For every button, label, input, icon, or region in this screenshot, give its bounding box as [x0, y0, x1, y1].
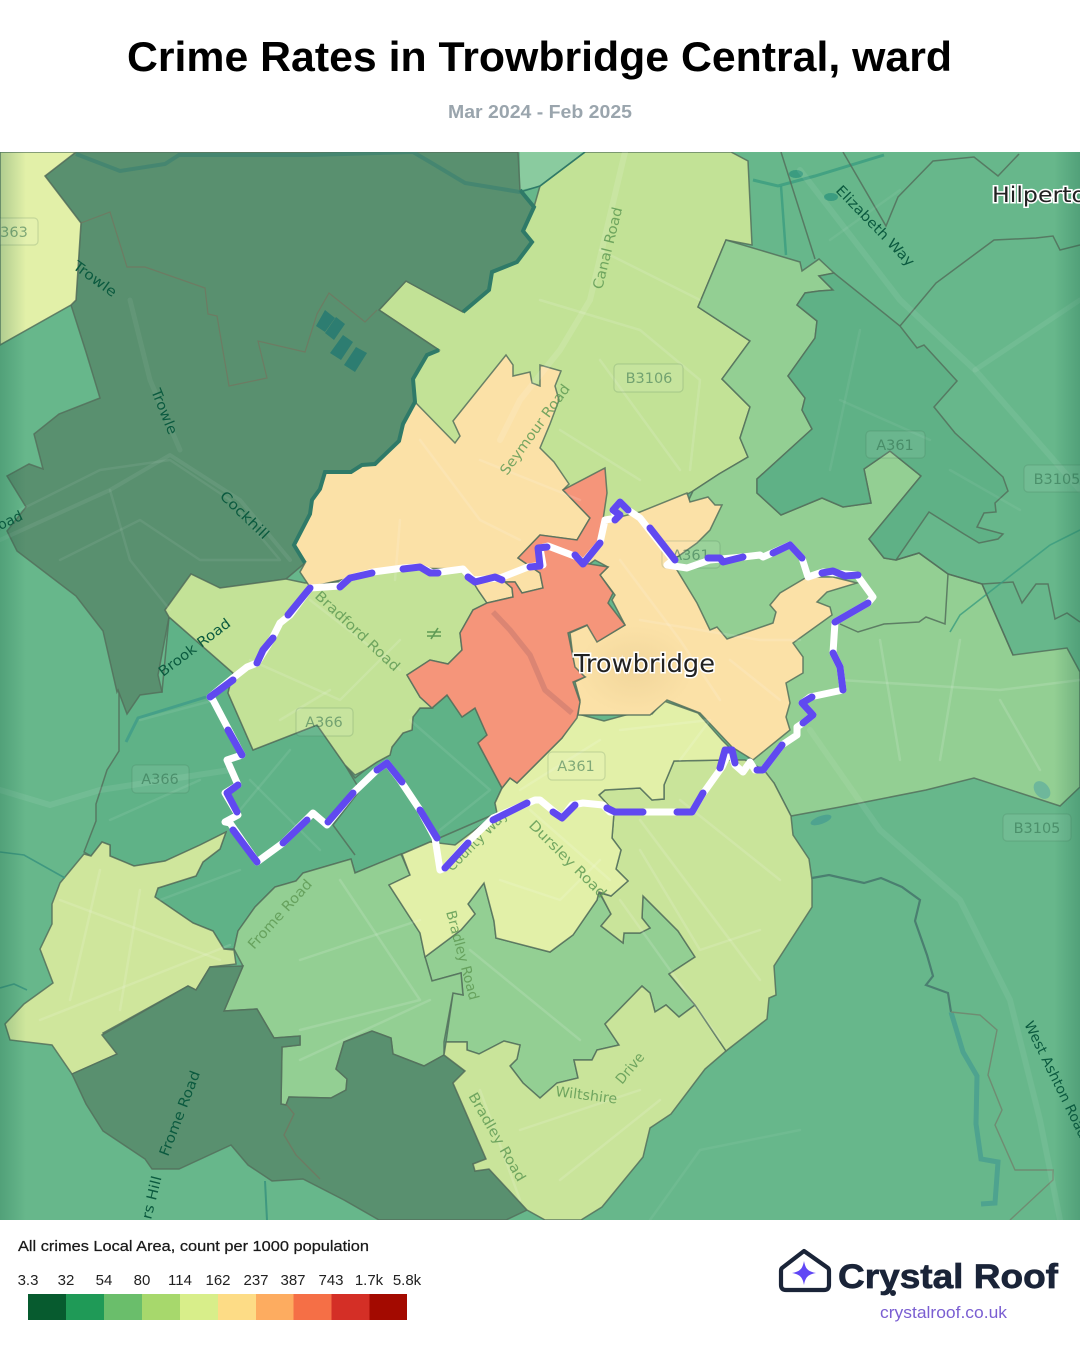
legend [18, 1238, 422, 1320]
road labels: Frome Road [245, 877, 316, 953]
region: north-east darker-green area [757, 273, 1008, 560]
road badges: A366 [141, 772, 179, 788]
regions: west and ward south-west low-crime areas [84, 617, 502, 949]
logo: Crystal Roof [781, 1251, 1059, 1322]
road labels: Canal Road [590, 206, 626, 291]
region: north-east river area [520, 152, 585, 190]
road labels: County Way [444, 807, 511, 875]
map panel [0, 152, 1080, 1221]
subtitle: date range: Mar 2024 - Feb 2025 [448, 101, 632, 122]
road labels [0, 183, 1080, 1221]
road labels: Frome Road [157, 1069, 204, 1158]
website url: crystalroof.co.uk [880, 1304, 1008, 1322]
ponds [316, 170, 1054, 828]
legend tick labels: 1.7k [355, 1272, 384, 1289]
region: Bradford Road light-green area [165, 567, 487, 775]
region: south-west pale-green area [5, 832, 236, 1074]
title: Crime Rates in Trowbridge Central, ward [127, 33, 952, 80]
region: south medium-green area [425, 883, 695, 1098]
road labels: Trowle [69, 258, 120, 301]
road labels: Seymour Road [497, 382, 574, 478]
road labels: Cockhill [216, 488, 272, 543]
road network [0, 152, 1080, 1220]
road labels: rs Hill [139, 1174, 166, 1221]
legend tick labels: 114 [168, 1272, 192, 1289]
legend tick labels: 3.3 [18, 1272, 38, 1289]
legend tick labels: 32 [58, 1272, 74, 1289]
region: Frome Road medium-green area [224, 854, 463, 1105]
road badges: A361 [876, 438, 914, 454]
legend tick labels: 5.8k [393, 1272, 422, 1289]
region: north light-green area [379, 152, 752, 540]
inner boundaries and streams [0, 152, 1080, 1220]
region: south-east pale-green area [599, 760, 812, 1051]
road labels: Elizabeth Way [832, 183, 917, 270]
legend tick labels: 387 [280, 1272, 306, 1289]
ward boundary: Trowbridge Central [210, 502, 873, 870]
brand name: Crystal Roof [838, 1258, 1059, 1296]
legend tick labels: 743 [318, 1272, 344, 1289]
region: Wiltshire Drive pale-green area [444, 986, 726, 1220]
road labels: Bradford Road [311, 588, 403, 675]
road labels: Bradley Road [442, 909, 481, 1002]
legend tick labels: 80 [134, 1272, 150, 1289]
legend tick labels [18, 1272, 422, 1289]
road badges: A361 [672, 548, 710, 564]
place label: Trowbridge: Trowbridge [573, 649, 715, 678]
region: south dark low-crime area [72, 966, 527, 1220]
legend title: All crimes Local Area, count per 1000 population [18, 1238, 369, 1255]
region: north-west corner pale area [0, 152, 81, 345]
icon: railway station [427, 628, 441, 639]
region: Trowbridge centre peach higher-crime area [570, 493, 857, 760]
legend tick labels: 162 [205, 1272, 231, 1289]
region: north-west dark low-crime area [7, 152, 534, 714]
railway through town centre [493, 612, 572, 713]
road labels: Brook Road [156, 616, 234, 680]
road labels: Trowle [147, 386, 180, 437]
region: south pale area around A361 and Dursley Road [389, 701, 729, 957]
road labels: Wiltshire [555, 1084, 618, 1108]
edge shading [0, 152, 1080, 1220]
road badges: B3105 [1034, 472, 1080, 488]
region: town-centre red highest-crime area [407, 468, 625, 788]
legend colour scale [28, 1294, 407, 1320]
road badges: B3106 [626, 371, 672, 387]
town-centre built-up shading [619, 659, 667, 700]
region: north-west peach higher-crime area [294, 355, 590, 603]
road badges: A361 [557, 759, 595, 775]
road badges [0, 218, 1080, 841]
road labels: Bradley Road [465, 1090, 528, 1185]
road badges: 363 [0, 225, 28, 241]
road labels: Drive [613, 1050, 648, 1088]
road badges: B3105 [1014, 821, 1060, 837]
icon: house with star [781, 1251, 829, 1290]
road labels: Dursley Road [525, 818, 609, 902]
legend tick labels: 54 [96, 1272, 112, 1289]
legend tick labels: 237 [243, 1272, 269, 1289]
region: north-east medium-green belt [660, 240, 1080, 816]
road badges: A366 [305, 715, 343, 731]
